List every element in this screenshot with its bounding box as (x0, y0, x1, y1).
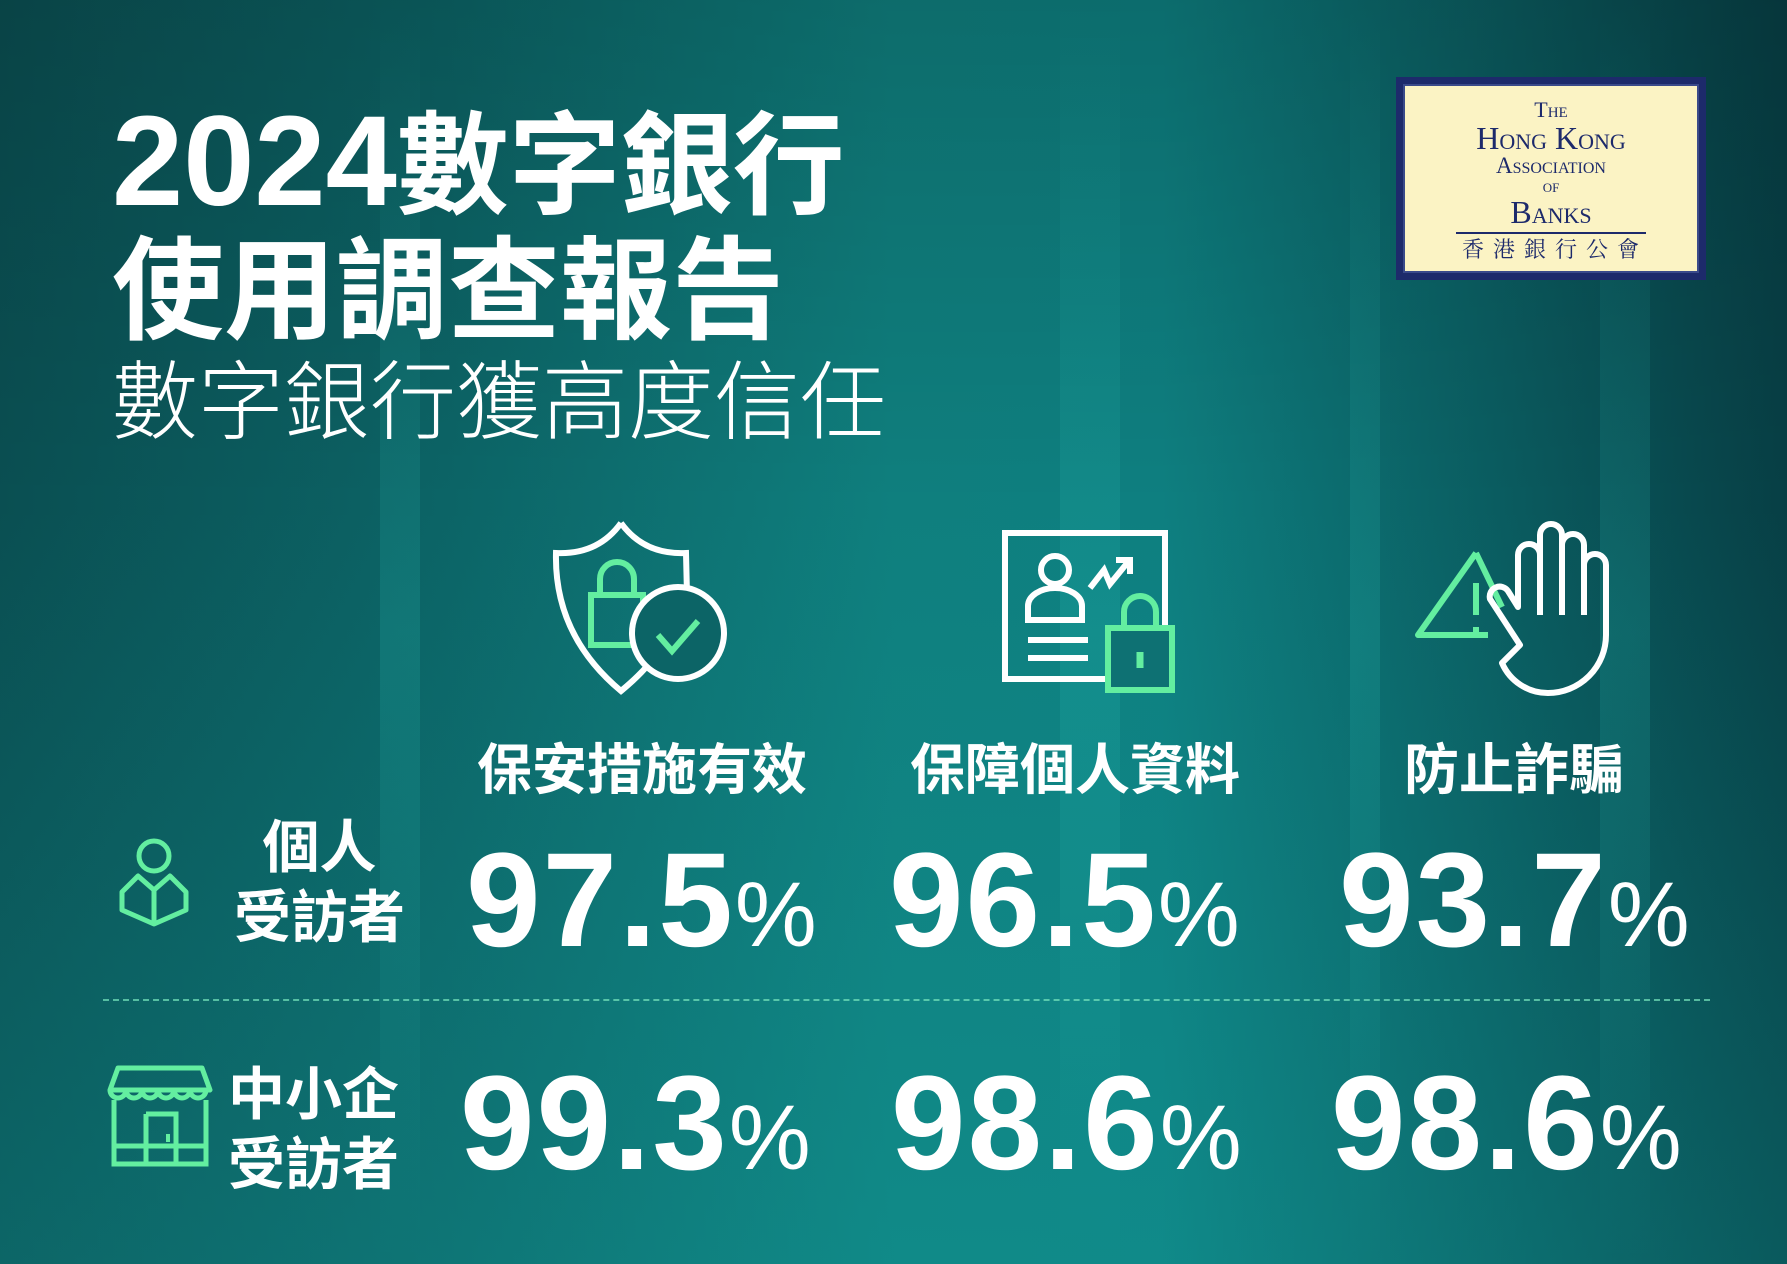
title: 2024數字銀行 (112, 76, 845, 238)
heading: fraud: 防止詐騙 (1404, 725, 1624, 805)
heading: security: 保安措施有效 (477, 725, 807, 805)
logo: Banks (1510, 194, 1592, 230)
number 98.6: 98.6% (1331, 1049, 1682, 1198)
logo: Association (1496, 153, 1606, 178)
logo: Hong Kong (1476, 120, 1626, 156)
icon: personal data (1002, 530, 1175, 693)
number 98.6: 98.6% (891, 1049, 1242, 1198)
logo (1396, 77, 1706, 280)
title (112, 76, 845, 363)
icon: shop (108, 1066, 212, 1166)
label: SME (228, 1049, 399, 1201)
logo: of (1543, 176, 1559, 197)
icon: stop fraud (1415, 521, 1609, 696)
heading: data: 保障個人資料 (910, 725, 1240, 805)
subtitle: 數字銀行獲高度信任 (112, 332, 886, 457)
icon: shield (552, 521, 727, 695)
logo: The (1534, 97, 1568, 122)
logo: 香港銀行公會 (1462, 233, 1648, 264)
title: 使用調查報告 (112, 201, 784, 363)
icon: person (120, 838, 188, 926)
number 93.7: 93.7% (1339, 826, 1690, 975)
number 96.5: 96.5% (889, 826, 1240, 975)
label: SME: 中小企 (228, 1049, 399, 1131)
label: individual: 受訪者 (234, 872, 405, 954)
label: SME: 受訪者 (228, 1119, 399, 1201)
number 97.5: 97.5% (466, 826, 817, 975)
number 99.3: 99.3% (460, 1049, 811, 1198)
label: individual: 個人 (262, 802, 376, 884)
label: individual (234, 802, 405, 954)
